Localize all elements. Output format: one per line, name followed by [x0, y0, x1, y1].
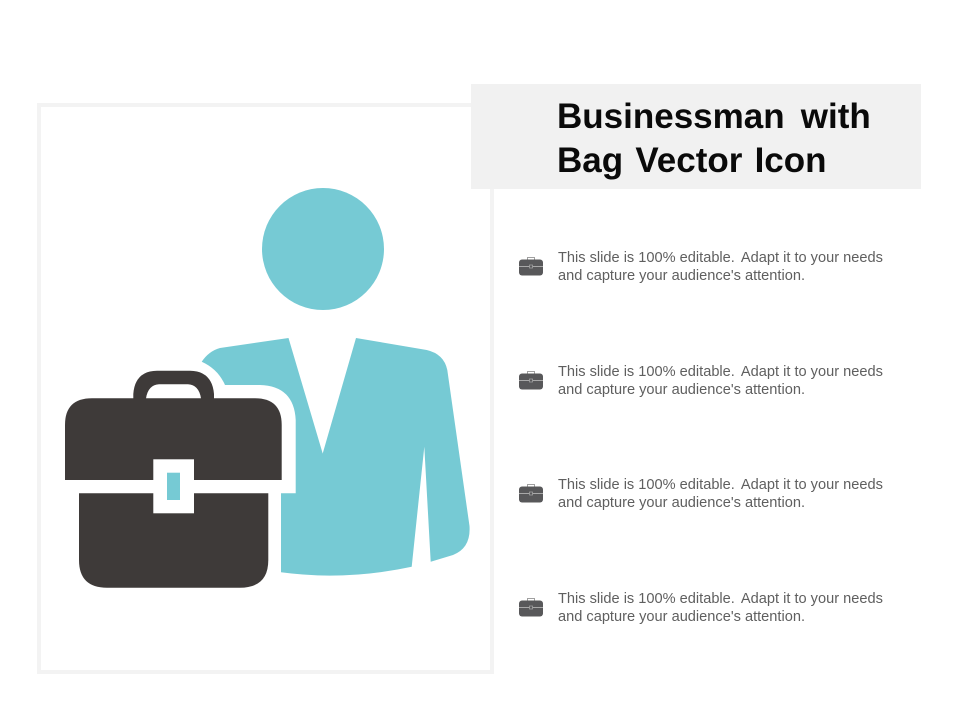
- text block 1: This slide is 100% editable. Adapt it to your needs: [558, 250, 883, 266]
- panel: illustration frame: [37, 103, 494, 674]
- text block 1: [558, 250, 883, 284]
- title: Bag Vector Icon: [557, 141, 827, 180]
- icon: bullet briefcase 4: [519, 598, 543, 616]
- title: Businessman with: [557, 97, 871, 136]
- title background: [471, 84, 921, 189]
- icon: briefcase: [65, 371, 282, 588]
- text block 1: and capture your audience's attention.: [558, 268, 805, 284]
- icon: bullet briefcase 2: [519, 371, 543, 390]
- text block 3: [558, 477, 883, 511]
- text block 4: This slide is 100% editable. Adapt it to your needs: [558, 591, 883, 607]
- text block 4: and capture your audience's attention.: [558, 609, 805, 625]
- text block 4: [558, 591, 883, 625]
- text block 2: [558, 364, 883, 398]
- text block 3: This slide is 100% editable. Adapt it to your needs: [558, 477, 883, 493]
- icon: head: [262, 188, 384, 310]
- icon: jacket: [202, 338, 470, 576]
- icon: bullet briefcase 3: [519, 484, 543, 502]
- text block 3: and capture your audience's attention.: [558, 495, 805, 511]
- title: [557, 97, 871, 180]
- icon: bullet briefcase 1: [519, 257, 543, 276]
- text block 2: This slide is 100% editable. Adapt it to your needs: [558, 364, 883, 380]
- text block 2: and capture your audience's attention.: [558, 382, 805, 398]
